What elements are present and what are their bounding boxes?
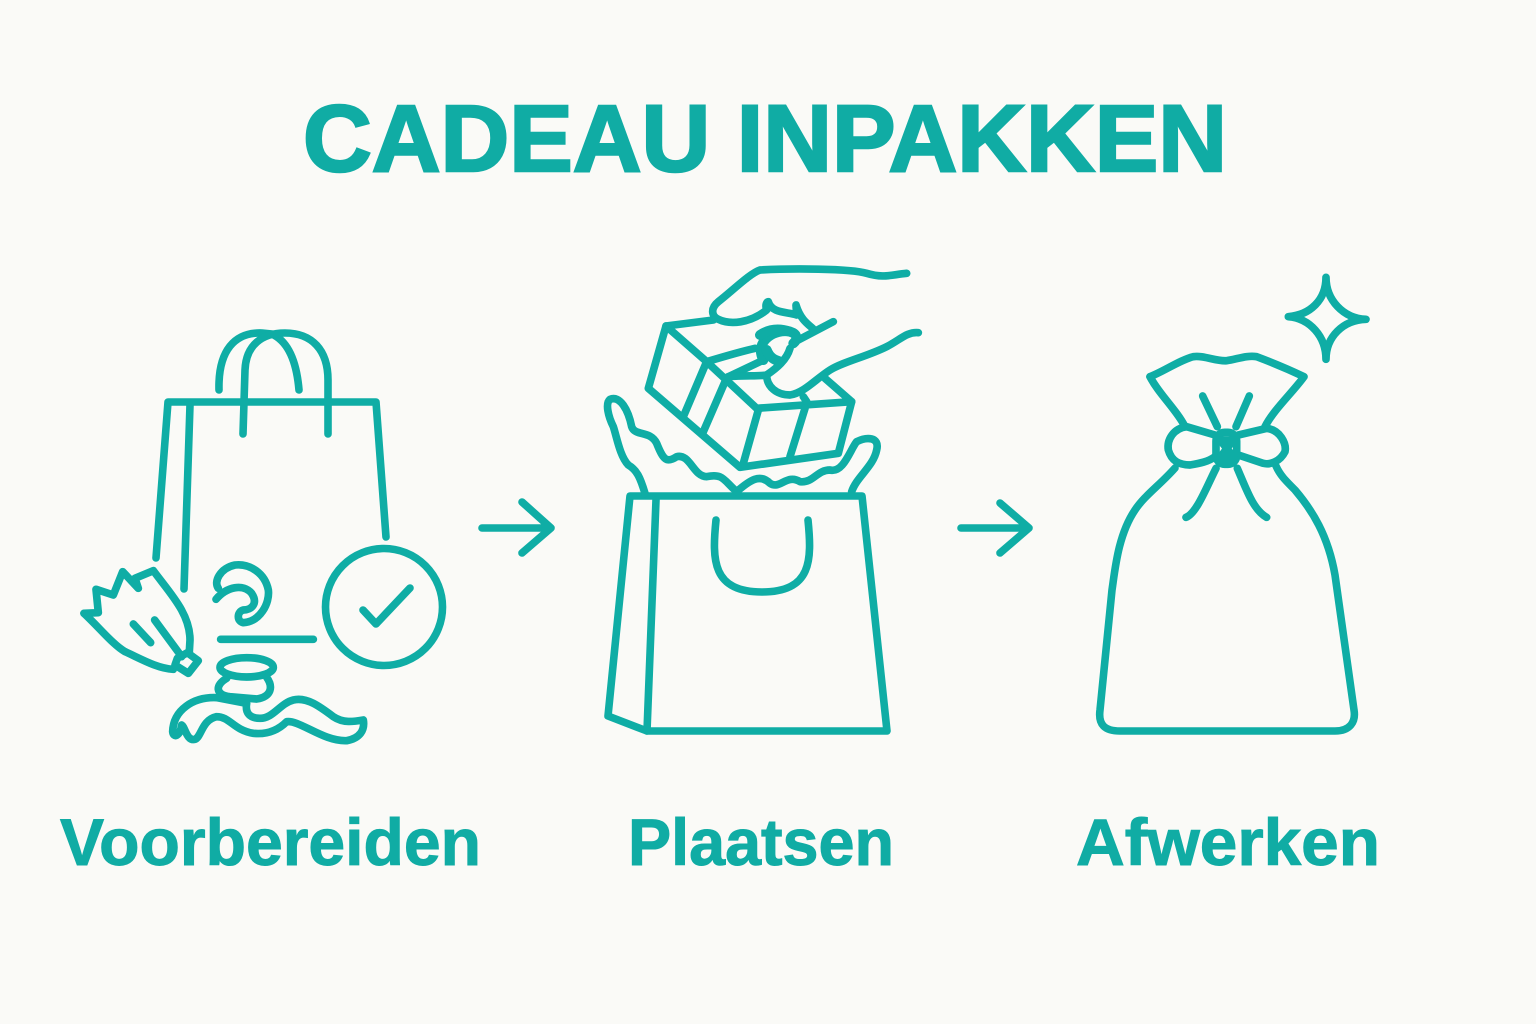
icon: preparation supplies — [84, 565, 364, 741]
step 3: afwerken icon — [1100, 277, 1366, 731]
icon: sack neck and bow — [1150, 356, 1304, 517]
label: afwerken: Afwerken — [1076, 805, 1380, 879]
title: CADEAU INPAKKEN — [303, 86, 1227, 192]
icon: sparkle — [1288, 277, 1366, 359]
icon: hand placing gift box in tissue paper — [608, 269, 918, 493]
icon: shopping bag with handles — [156, 333, 386, 589]
icon: open bag — [608, 496, 887, 731]
icon: tied gift sack body — [1100, 466, 1354, 731]
step 2: plaatsen icon — [608, 269, 918, 731]
step 1: voorbereiden icon — [84, 333, 442, 741]
icon: check mark in circle — [326, 548, 442, 666]
arrow 1 — [482, 502, 551, 553]
label: voorbereiden: Voorbereiden — [60, 805, 481, 879]
label: plaatsen: Plaatsen — [628, 805, 894, 879]
arrow 2 — [961, 503, 1029, 553]
